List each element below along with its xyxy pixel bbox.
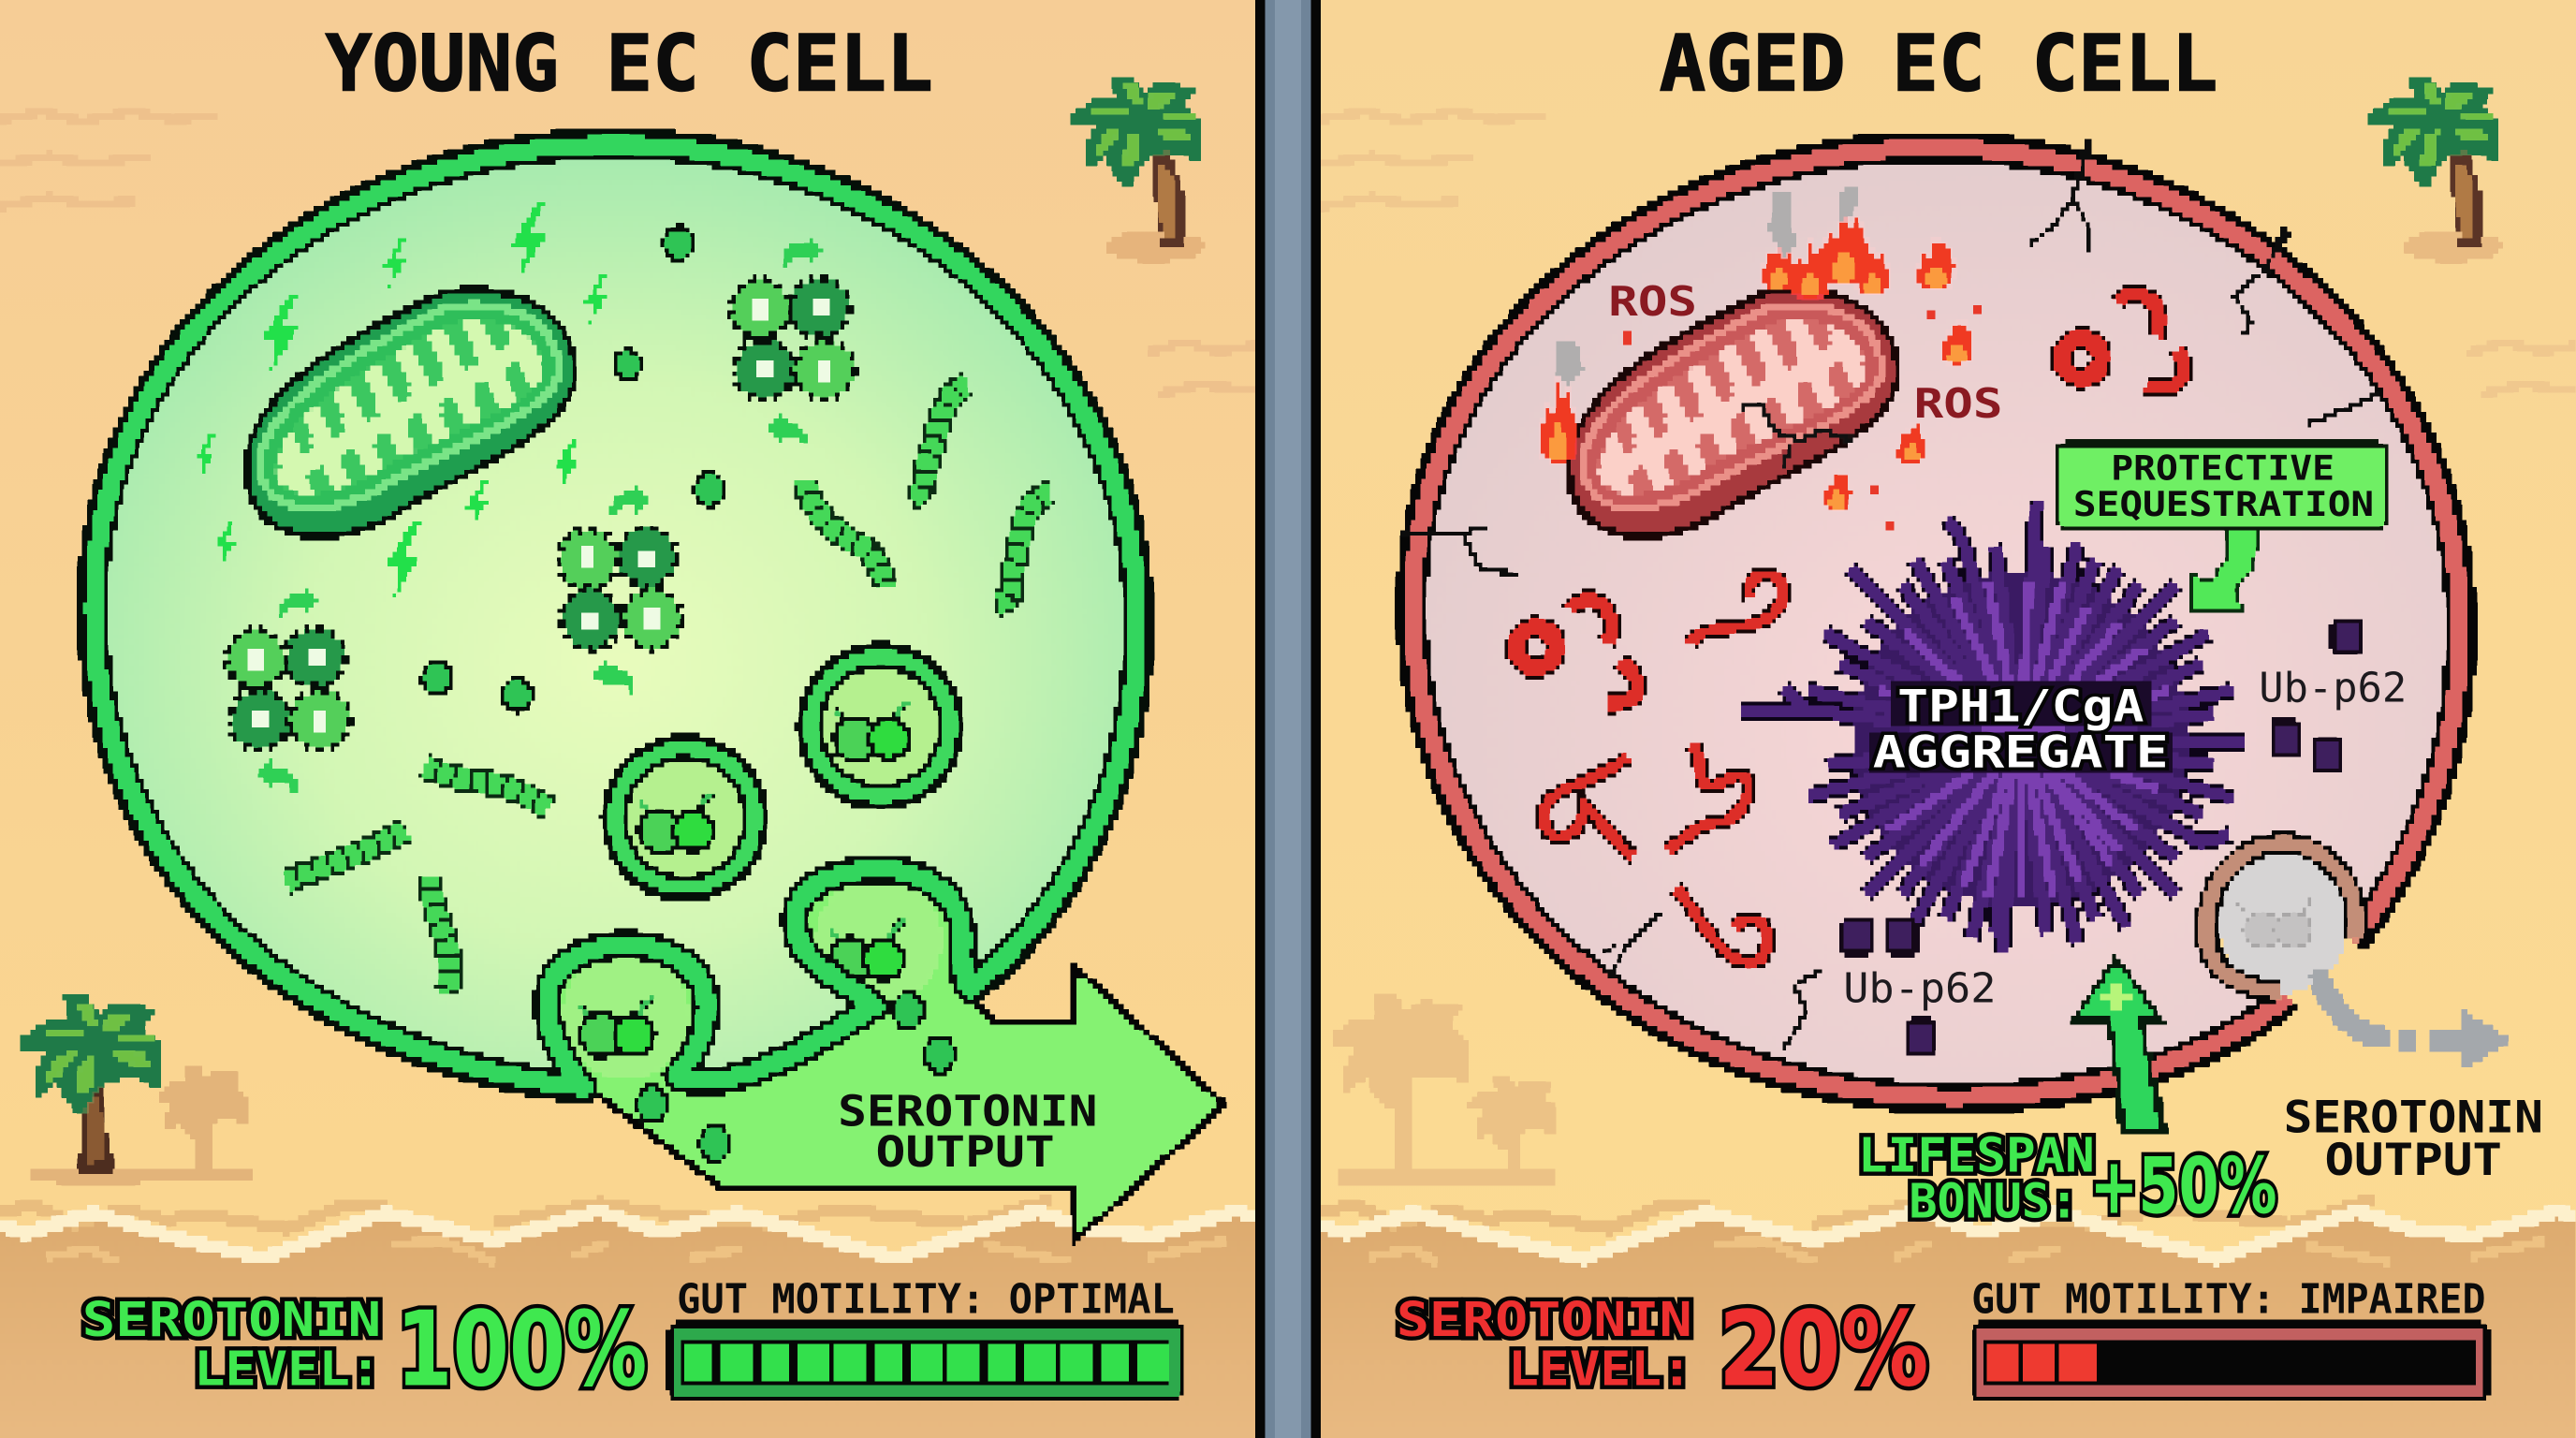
Ub-p62 squares: bottom (1843, 920, 1936, 1053)
smoke (1553, 184, 1860, 386)
palm trees: aged panel faded (1332, 995, 1555, 1183)
panel: aged EC cell background (1321, 0, 2576, 1438)
gray depleted vesicle (2206, 843, 2356, 992)
gray faded output arrow (2317, 970, 2510, 1068)
palm tree: young panel top right (1073, 78, 1203, 261)
title: young: YOUNG EC CELL (326, 20, 933, 110)
callout: protective sequestration box (2058, 444, 2385, 613)
decorative dunes: aged panel (1321, 111, 2576, 394)
serotonin dots (422, 227, 724, 712)
ROS label 2: ROS (1914, 380, 2002, 428)
palm tree: young panel bottom left (22, 997, 161, 1184)
young cell body (94, 144, 1137, 1088)
serotonin output arrow (547, 869, 1222, 1239)
broken proteins: left (1516, 600, 1638, 704)
arrow label: serotonin output: OUTPUT (875, 1127, 1055, 1177)
vesicle 1 (795, 641, 966, 812)
young mitochondrion (246, 283, 575, 536)
ROS label 1: ROS (1608, 278, 1697, 326)
faded molecule (2234, 894, 2313, 948)
title: aged: AGED EC CELL (1660, 20, 2217, 110)
Ub-p62 squares: right (2272, 621, 2359, 770)
young cell (94, 144, 1222, 1239)
young cell membrane (94, 144, 1137, 1088)
flames (1539, 205, 1974, 511)
arrow label: serotonin output (838, 1086, 1097, 1177)
divider between panels (1255, 0, 1321, 1438)
ROS specks (1623, 302, 1982, 531)
lifespan bonus label: +50% (2089, 1141, 2277, 1231)
released serotonin (637, 992, 955, 1162)
protein clusters (227, 278, 855, 749)
palm tree: aged panel top right (2371, 78, 2500, 261)
HUD: aged serotonin level (1397, 1290, 1928, 1411)
misfolded red squiggles (1544, 575, 1783, 962)
callout label: PROTECTIVE (2111, 448, 2334, 489)
helix ribbons (285, 385, 1051, 994)
callout label (2073, 448, 2374, 524)
molecules in exocytosis pockets (580, 920, 905, 1057)
lifespan bonus label (1858, 1128, 2277, 1231)
aggregate label: TPH1/CgA (1897, 682, 2144, 733)
HUD: aged gut motility label: GUT MOTILITY: IMPAIRED (1971, 1275, 2485, 1323)
faded output label (2284, 1092, 2543, 1186)
HUD: young serotonin level: LEVEL: (194, 1343, 381, 1398)
HUD: young serotonin level: SEROTONIN (82, 1293, 381, 1348)
faded output label: SEROTONIN (2284, 1092, 2543, 1143)
TPH1/CgA aggregate (1738, 501, 2247, 953)
recycling arrows (255, 230, 825, 795)
aggregate label (1873, 682, 2169, 779)
aged cell (1403, 138, 2510, 1131)
lifespan bonus label: BONUS: (1909, 1175, 2078, 1230)
aged cell body (1412, 148, 2460, 1097)
aggregate label: AGGREGATE (1873, 727, 2169, 779)
HUD: aged serotonin level: LEVEL: (1508, 1343, 1692, 1398)
beach: young panel shoreline (0, 1199, 1257, 1438)
arrow label: serotonin output: SEROTONIN (838, 1086, 1097, 1136)
broken proteins: upper right (2062, 294, 2183, 389)
Ub-p62 label bottom: Ub-p62 (1843, 965, 1996, 1013)
beach: aged panel shoreline (1321, 1199, 2576, 1438)
bar: aged gut motility (1973, 1325, 2487, 1399)
HUD: young gut motility label: GUT MOTILITY: OPTIMAL (677, 1275, 1175, 1323)
lifespan bonus arrow (2073, 958, 2162, 1131)
palm tree: young panel faded (33, 1067, 250, 1181)
aged mitochondrion (1569, 283, 1897, 536)
bar: young gut motility (670, 1325, 1181, 1399)
aged cell membrane (1412, 148, 2460, 1097)
Ub-p62 label right: Ub-p62 (2259, 664, 2407, 712)
energy bolts (193, 200, 608, 605)
cracks (1403, 138, 2378, 1051)
HUD bars (670, 1325, 2487, 1399)
HUD: aged serotonin level: 20% (1719, 1290, 1928, 1411)
vesicle 2 (600, 733, 770, 903)
HUD: aged serotonin level: SEROTONIN (1397, 1293, 1692, 1348)
callout label: SEQUESTRATION (2073, 484, 2374, 524)
decorative dunes: young panel (0, 111, 1257, 394)
HUD: young serotonin level: 100% (396, 1290, 648, 1411)
faded output label: OUTPUT (2324, 1135, 2502, 1186)
lifespan bonus label: LIFESPAN (1858, 1128, 2095, 1183)
panel: young EC cell background (0, 0, 1257, 1438)
HUD: young serotonin level (82, 1290, 648, 1411)
